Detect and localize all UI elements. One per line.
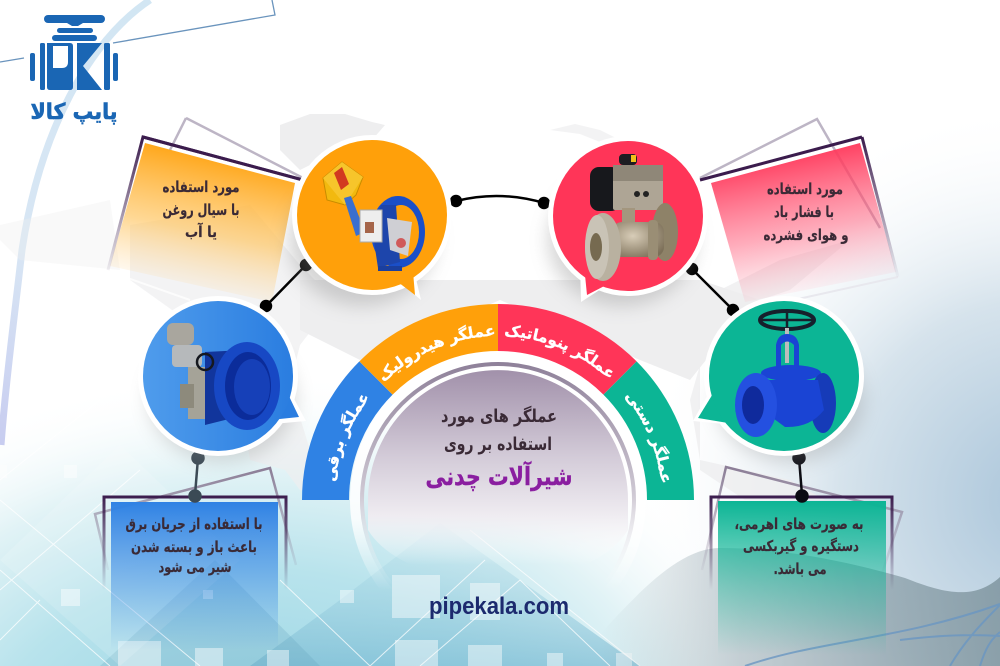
label: manual: عملگر دستی <box>625 395 670 482</box>
connector: red to green <box>687 264 738 315</box>
label: hydraulic: عملگر هیدرولیک <box>382 324 494 381</box>
text: orange note: با سیال روغن <box>162 201 240 219</box>
center heading: استفاده بر روی <box>444 434 552 455</box>
text: blue note: شیر می شود <box>158 558 232 576</box>
text: green note <box>734 515 864 578</box>
icon: electric butterfly valve <box>167 323 280 430</box>
text: red note: مورد استفاده <box>767 180 843 198</box>
connector: orange to blue <box>261 260 311 311</box>
text: orange note <box>162 178 240 241</box>
segment: electric <box>302 361 393 500</box>
connector: blue to note <box>190 452 204 502</box>
panel: red note <box>700 119 898 303</box>
logo text: پایپ کالا <box>30 100 118 125</box>
label: electric: عملگر برقی <box>328 395 368 482</box>
center heading: شیرآلات چدنی <box>426 461 572 492</box>
center heading <box>426 405 572 492</box>
bubble: hydraulic valve <box>288 135 452 306</box>
text: green note: به صورت های اهرمی، <box>734 515 864 533</box>
connector: orange to red <box>451 196 549 208</box>
text: blue note: با استفاده از جریان برق <box>126 515 262 533</box>
logo <box>30 15 118 125</box>
text: blue note: باعث باز و بسته شدن <box>131 538 257 556</box>
label: pneumatic: عملگر پنوماتیک <box>505 325 613 378</box>
text: orange note: یا آب <box>185 223 217 241</box>
top left thin line <box>0 0 275 62</box>
logo mark <box>30 15 118 90</box>
panel: green note <box>702 467 902 666</box>
bubble: electric valve <box>138 296 306 462</box>
network lines bottom right <box>745 604 1000 666</box>
bubble: manual globe valve <box>693 296 864 462</box>
text: red note: و هوای فشرده <box>764 226 848 244</box>
icon: pneumatic ball valve <box>585 154 678 281</box>
segment: manual <box>603 361 694 500</box>
connector: green to note <box>794 452 808 502</box>
panel: orange note <box>105 118 303 302</box>
world map <box>0 114 850 500</box>
diamond pattern bottom left <box>0 400 640 666</box>
segment: pneumatic <box>498 304 637 395</box>
text: orange note: مورد استفاده <box>162 178 240 196</box>
dome bottom right <box>570 548 1000 666</box>
website: pipekala.com <box>429 593 569 620</box>
inner disc <box>368 370 628 585</box>
text: green note: دستگیره و گیربکسی <box>743 537 859 555</box>
top left arc <box>1 0 150 445</box>
text: red note: با فشار باد <box>774 203 834 221</box>
icon: globe valve <box>735 311 836 437</box>
central semicircle <box>302 304 694 581</box>
center heading: عملگر های مورد <box>441 405 557 427</box>
icon: hydraulic valve <box>323 162 425 271</box>
segment: hydraulic <box>359 304 498 395</box>
panel: blue note <box>95 468 296 666</box>
text: green note: می باشد. <box>774 560 826 578</box>
text: red note <box>764 180 848 244</box>
bubble: pneumatic valve <box>548 136 708 306</box>
text: blue note <box>126 515 262 576</box>
